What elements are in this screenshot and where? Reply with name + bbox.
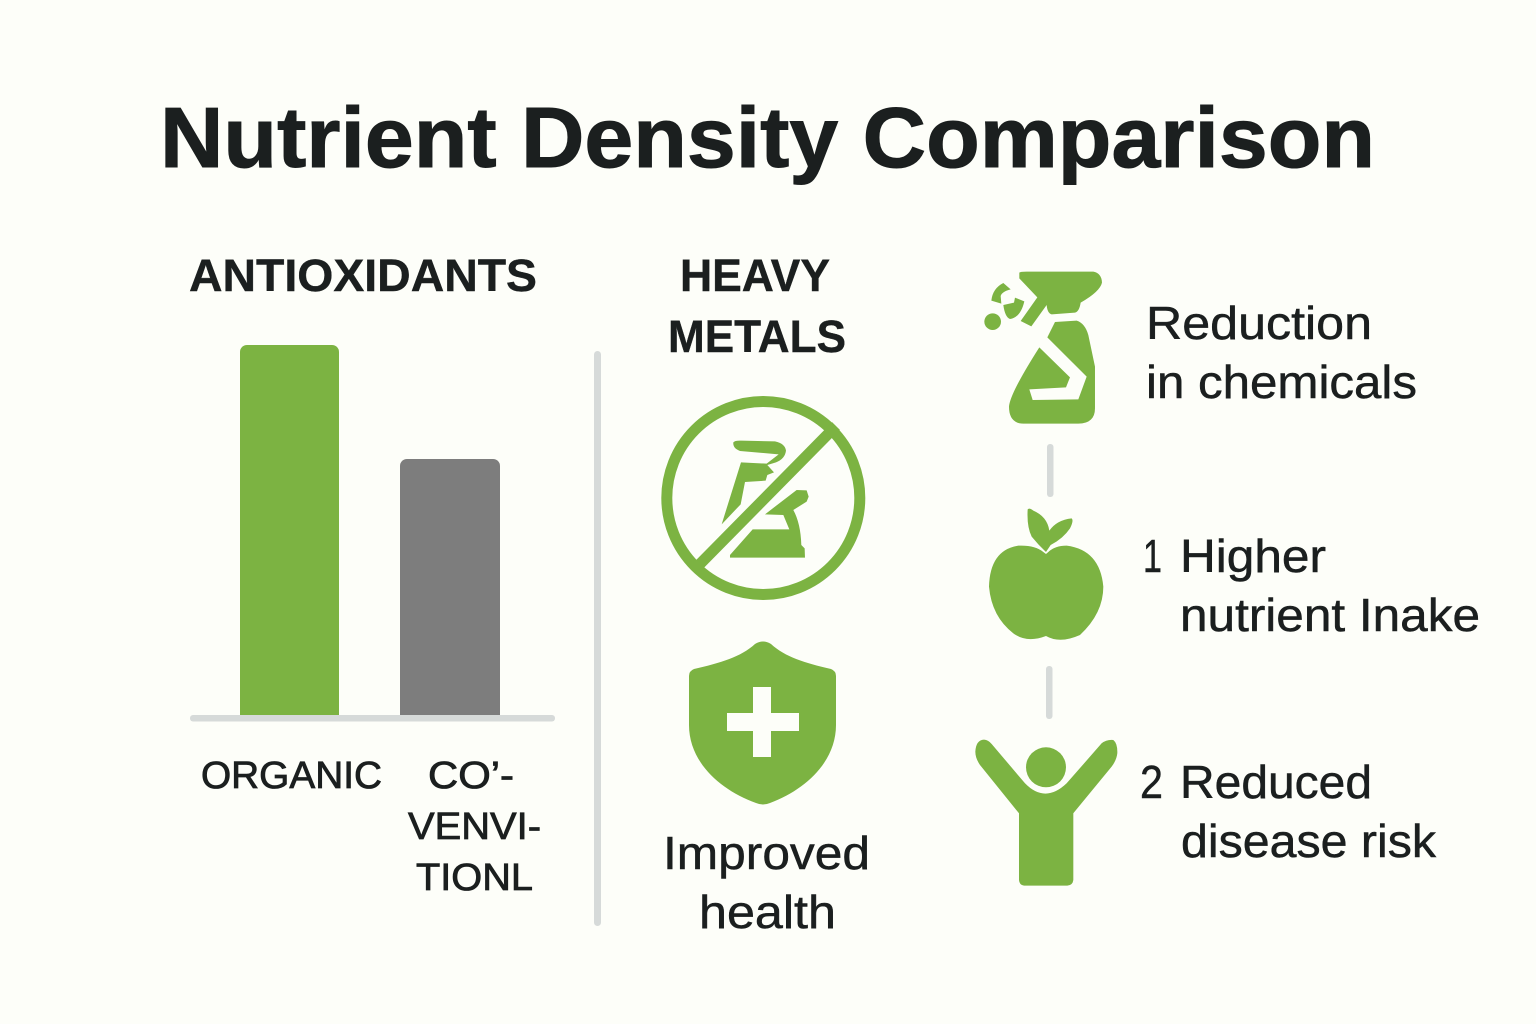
text: improved health: health bbox=[699, 886, 836, 938]
connector bbox=[1047, 444, 1054, 497]
heading: antioxidants: ANTIOXIDANTS bbox=[189, 250, 537, 301]
bar: organic bbox=[240, 345, 339, 716]
text: higher nutrient intake: Higher bbox=[1180, 530, 1326, 582]
icon: spray bottle bbox=[984, 272, 1102, 424]
heading: heavy metals bbox=[668, 250, 846, 362]
icon: person with raised arms bbox=[975, 740, 1117, 886]
heading: heavy metals: METALS bbox=[668, 311, 846, 362]
text: reduction in chemicals: Reduction bbox=[1146, 297, 1372, 349]
text: higher nutrient intake bbox=[1143, 530, 1480, 641]
heading: heavy metals: HEAVY bbox=[680, 250, 830, 301]
icon: shield with cross bbox=[689, 642, 836, 804]
divider bbox=[594, 351, 601, 926]
label: conventional: CO’- bbox=[428, 755, 514, 797]
panel: heavy metals bbox=[663, 250, 870, 938]
text: higher nutrient intake: nutrient Inake bbox=[1180, 589, 1480, 641]
text: reduced disease risk: 2 bbox=[1140, 756, 1163, 808]
label: conventional: TIONL bbox=[416, 857, 533, 899]
bar: conventional bbox=[400, 459, 500, 716]
title: Nutrient Density Comparison bbox=[160, 91, 1375, 186]
label: organic: ORGANIC bbox=[201, 755, 382, 797]
text: improved health: Improved bbox=[663, 827, 870, 879]
text: reduction in chemicals bbox=[1146, 297, 1417, 408]
label: conventional bbox=[408, 755, 541, 899]
icon: no heavy metals bbox=[667, 402, 860, 594]
text: reduction in chemicals: in chemicals bbox=[1146, 356, 1417, 408]
text: reduced disease risk bbox=[1140, 756, 1437, 867]
bar chart bbox=[190, 345, 555, 722]
text: reduced disease risk: disease risk bbox=[1181, 815, 1437, 867]
text: higher nutrient intake: 1 bbox=[1143, 530, 1162, 582]
label: conventional: VENVI- bbox=[408, 806, 541, 848]
panel: antioxidants bbox=[189, 250, 555, 899]
chart axis bbox=[190, 715, 555, 722]
panel: benefits bbox=[975, 272, 1480, 886]
icon: apple bbox=[989, 509, 1103, 640]
text: reduced disease risk: Reduced bbox=[1180, 756, 1372, 808]
text: improved health bbox=[663, 827, 870, 938]
connector bbox=[1046, 666, 1052, 719]
